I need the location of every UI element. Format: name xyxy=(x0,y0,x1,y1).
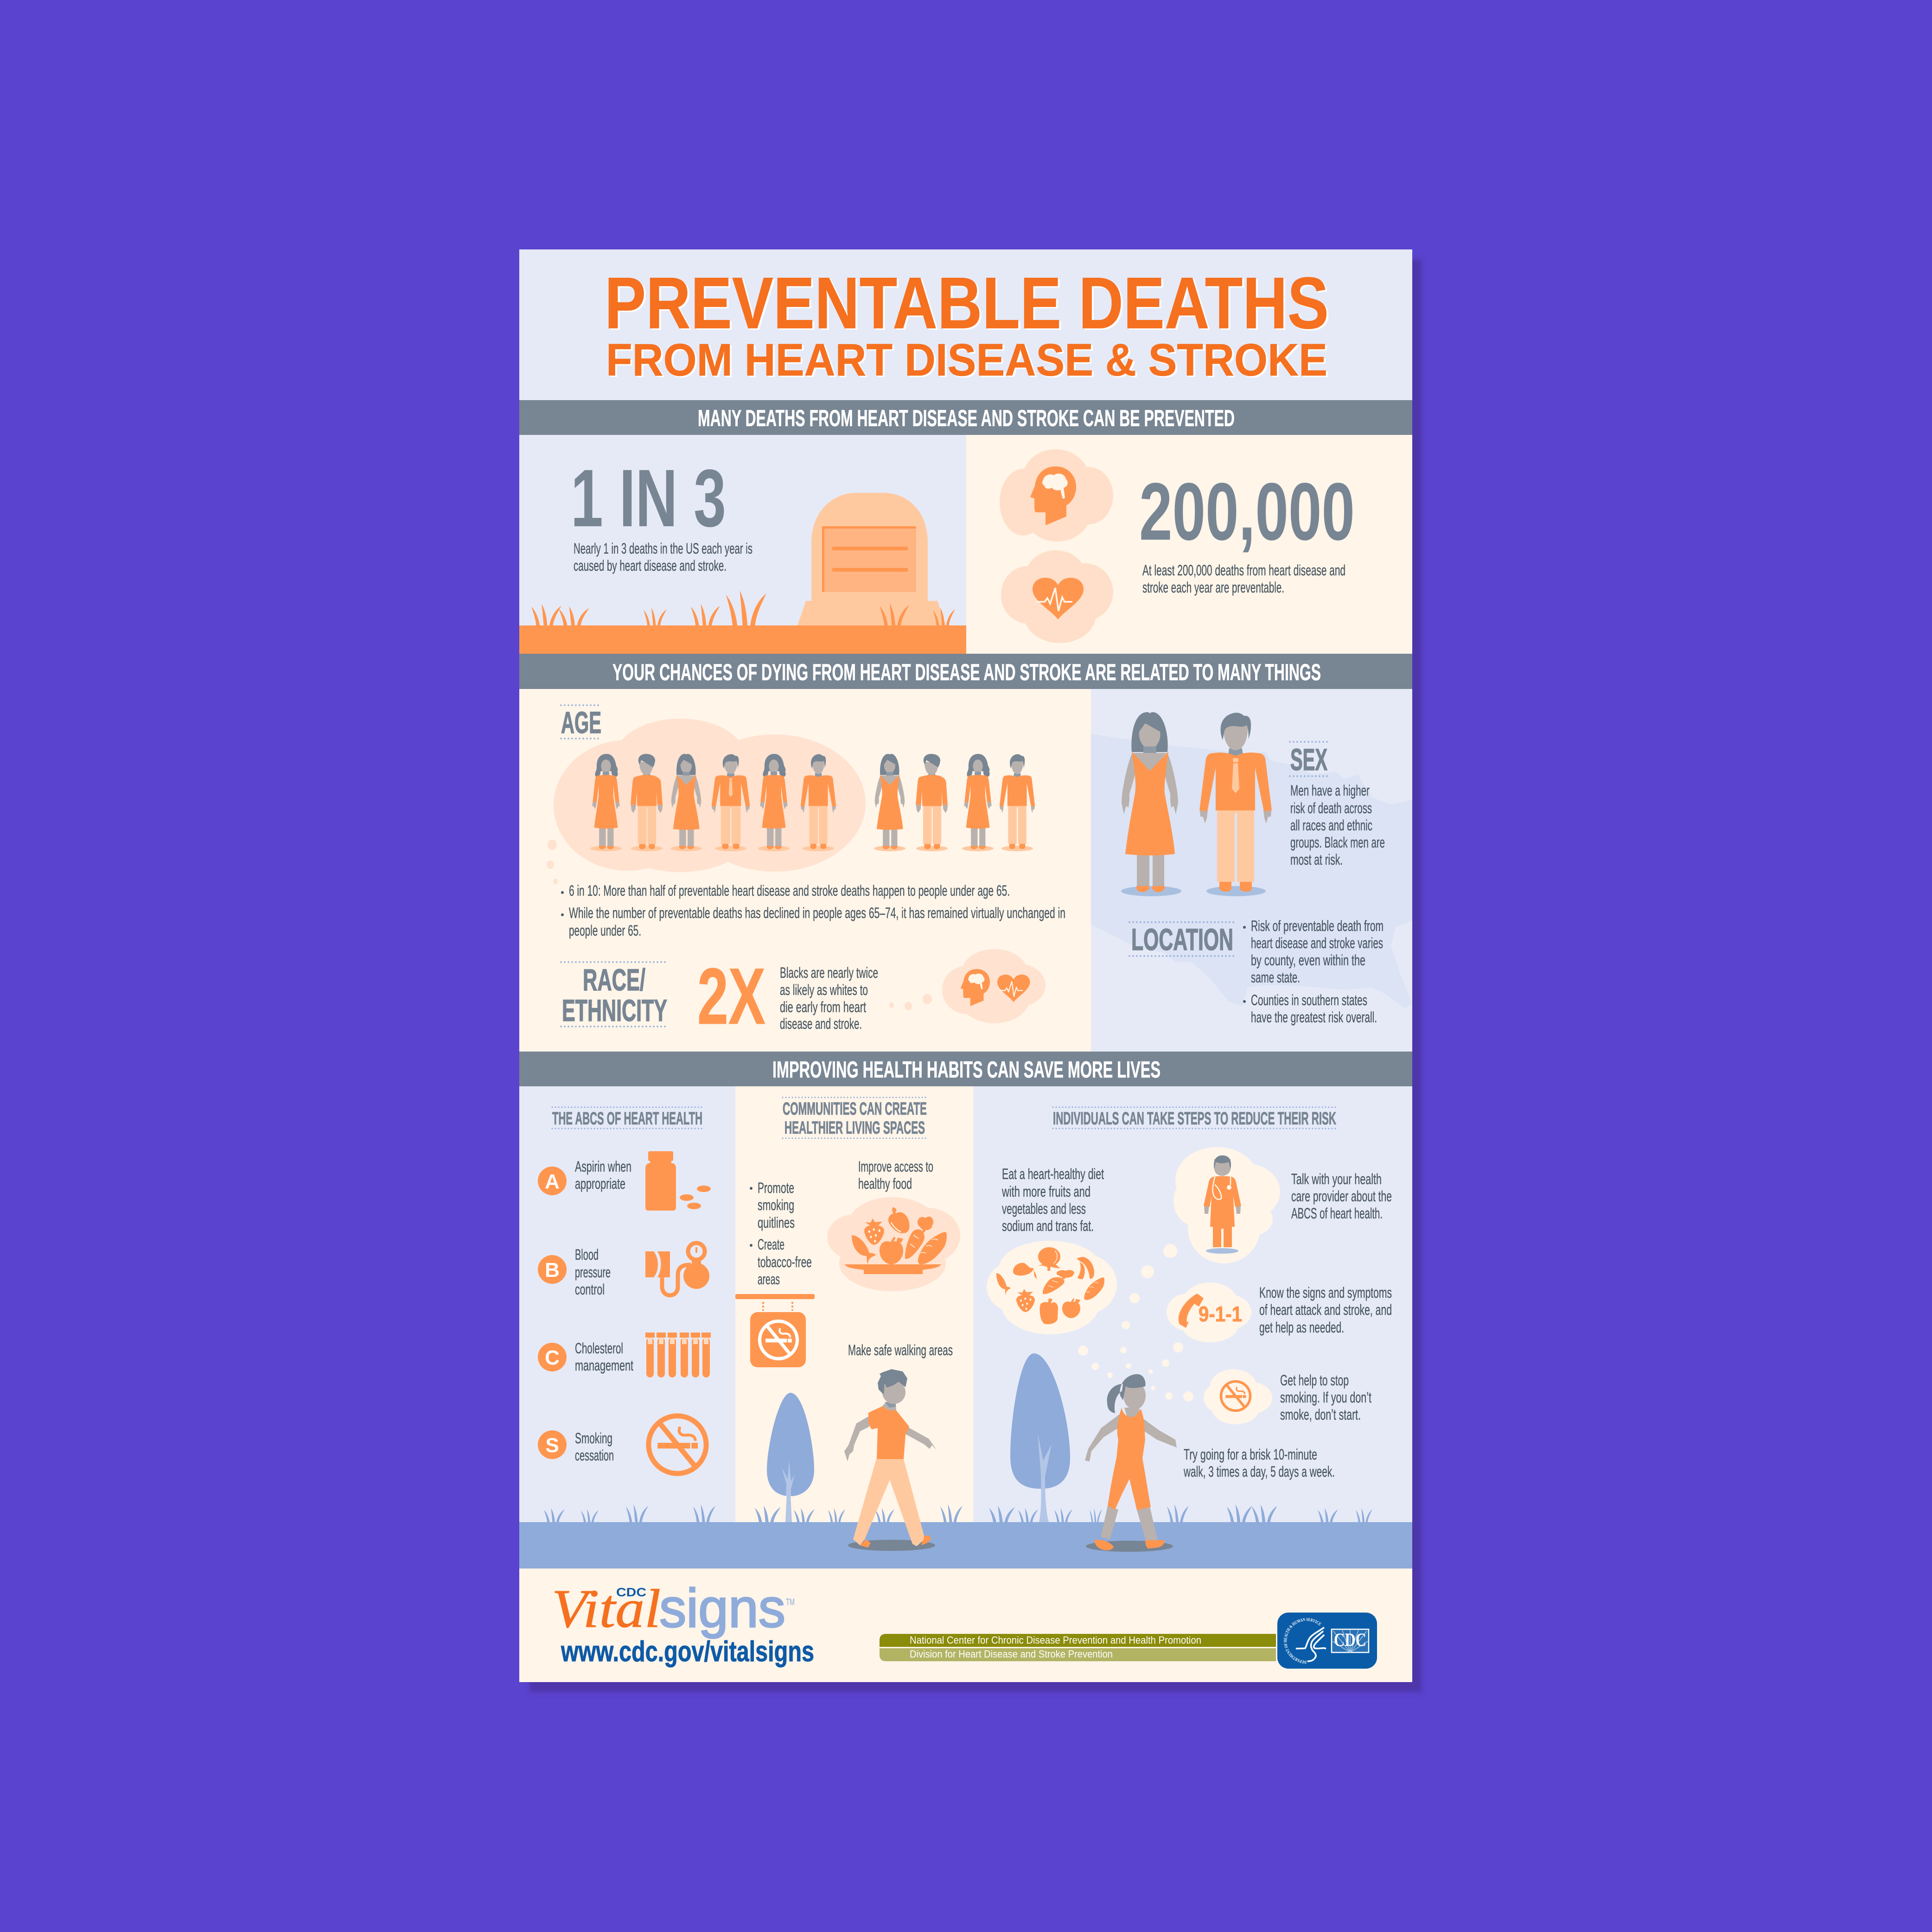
heading: location xyxy=(1129,922,1235,956)
text: eat healthy xyxy=(1001,1166,1104,1234)
heading: race/ethnicity: RACE/ xyxy=(583,963,645,997)
item: S smoking xyxy=(538,1416,706,1473)
heading: sex: SEX xyxy=(1290,742,1327,777)
heading: race/ethnicity: ETHNICITY xyxy=(562,993,667,1027)
text: location bullets: Counties in southern states xyxy=(1251,992,1367,1008)
heading: individuals xyxy=(1053,1107,1336,1129)
icon: tree xyxy=(1010,1353,1070,1522)
icon: no smoking sign xyxy=(735,1294,815,1367)
text: age bullets xyxy=(561,882,1065,939)
heading: communities xyxy=(783,1097,927,1138)
item: A aspirin: A xyxy=(545,1170,560,1193)
text: smoking bullets: Promote xyxy=(758,1180,794,1196)
text: eat healthy: Eat a heart-healthy diet xyxy=(1002,1166,1104,1182)
text: brisk walk: Try going for a brisk 10-minute xyxy=(1184,1446,1317,1463)
logo: CDC Vital Signs: Vital xyxy=(552,1578,661,1639)
text: 1 in 3 description xyxy=(574,540,752,574)
item: B blood pressure xyxy=(538,1243,709,1298)
stat: 1 in 3: 1 IN 3 xyxy=(571,453,726,544)
item: C cholesterol: management xyxy=(575,1357,633,1374)
logo: HHS CDC: CDC xyxy=(1334,1629,1366,1650)
item: A aspirin: Aspirin when xyxy=(575,1158,631,1175)
text: sex description: Men have a higher xyxy=(1290,782,1370,799)
grass: blue tufts xyxy=(544,1505,1372,1522)
panel: communities xyxy=(735,1086,973,1522)
title: PREVENTABLE DEATHS xyxy=(605,262,1329,344)
text: stop smoking: Get help to stop xyxy=(1280,1372,1349,1389)
banner: your chances xyxy=(519,654,1412,689)
grass: orange tufts xyxy=(531,591,955,625)
organization bars: Division for Heart Disease and Stroke Prevention xyxy=(910,1648,1113,1660)
panel: age and race xyxy=(519,689,1091,1052)
text: eat healthy: vegetables and less xyxy=(1002,1200,1086,1217)
text: location bullets: by county, even within the xyxy=(1251,952,1365,969)
text: age bullets: people under 65. xyxy=(569,922,641,939)
heading: location: LOCATION xyxy=(1131,922,1233,956)
text: age bullets: 6 in 10: More than half of preventable heart disease and stroke deaths happen to people under age 65. xyxy=(569,882,1010,899)
panel: ABCs of heart health xyxy=(519,1086,735,1522)
ground: blue xyxy=(519,1522,1412,1569)
text: 1 in 3 description: caused by heart disease and stroke. xyxy=(574,557,727,574)
heading: communities: COMMUNITIES CAN CREATE xyxy=(783,1099,927,1119)
heading: sex xyxy=(1290,742,1328,777)
organization bars xyxy=(880,1634,1276,1661)
banner: many deaths: MANY DEATHS FROM HEART DISEASE AND STROKE CAN BE PREVENTED xyxy=(698,405,1235,431)
text: walking areas: Make safe walking areas xyxy=(848,1342,953,1358)
text: sex description: most at risk. xyxy=(1290,851,1343,868)
item: B blood pressure: pressure xyxy=(575,1264,611,1281)
banner: improving health habits xyxy=(519,1052,1412,1086)
stat: 200,000: 200,000 xyxy=(1139,466,1355,557)
text: eat healthy: sodium and trans fat. xyxy=(1002,1218,1094,1234)
text: 200,000 description: At least 200,000 deaths from heart disease and xyxy=(1142,562,1345,579)
text: 200,000 description: stroke each year are preventable. xyxy=(1142,579,1284,596)
logo: CDC Vital Signs: TM xyxy=(786,1597,795,1607)
item: C cholesterol: C xyxy=(545,1346,560,1369)
heading: race/ethnicity xyxy=(561,962,667,1027)
cloud: age xyxy=(547,719,866,884)
item: S smoking: cessation xyxy=(575,1447,614,1464)
text: eat healthy: with more fruits and xyxy=(1001,1183,1090,1200)
icon: no smoking cloud xyxy=(1204,1369,1272,1424)
organization bars: National Center for Chronic Disease Prevention and Health Promotion xyxy=(910,1634,1201,1646)
text: know the signs: get help as needed. xyxy=(1259,1319,1344,1336)
item: B blood pressure: Blood xyxy=(575,1246,599,1263)
text: improve food access: healthy food xyxy=(858,1175,912,1192)
item: S smoking: Smoking xyxy=(575,1430,612,1447)
logo: CDC Vital Signs: CDC xyxy=(616,1585,646,1599)
text: know the signs: Know the signs and symptoms xyxy=(1259,1284,1392,1301)
text: stop smoking: smoking. If you don’t xyxy=(1280,1389,1371,1406)
item: C cholesterol: Cholesterol xyxy=(575,1340,623,1357)
icon: tombstone xyxy=(797,493,946,625)
text: race description: disease and stroke. xyxy=(780,1015,862,1032)
text: smoking bullets xyxy=(750,1180,812,1288)
text: smoking bullets: areas xyxy=(758,1271,780,1288)
icon: tree xyxy=(767,1393,814,1522)
icon: 9-1-1 cloud xyxy=(1167,1282,1251,1342)
icon: heart in cloud xyxy=(1001,550,1113,643)
url: www.cdc.gov/vitalsigns xyxy=(561,1636,814,1668)
text: brisk walk xyxy=(1183,1446,1335,1480)
text: location bullets: Risk of preventable death from xyxy=(1251,918,1384,934)
text: race description xyxy=(780,964,878,1032)
heading: age xyxy=(561,705,602,740)
item: B blood pressure: B xyxy=(545,1259,560,1282)
heading: ABCs xyxy=(552,1107,703,1129)
text: improve food access xyxy=(858,1158,933,1192)
text: talk with provider: care provider about the xyxy=(1291,1188,1392,1205)
panel: title background xyxy=(519,249,1412,400)
text: location bullets xyxy=(1243,918,1384,1026)
people row: 6 in 10 xyxy=(590,754,1035,851)
text: race description: as likely as whites to xyxy=(780,982,868,998)
text: 200,000 description xyxy=(1142,562,1345,596)
text: location bullets: heart disease and stroke varies xyxy=(1251,935,1383,951)
text: know the signs: of heart attack and stroke, and xyxy=(1259,1301,1392,1318)
text: brisk walk: walk, 3 times a day, 5 days a week. xyxy=(1183,1463,1335,1480)
text: smoking bullets: smoking xyxy=(758,1197,794,1213)
panel: 200,000 xyxy=(966,435,1412,654)
figure: walking woman xyxy=(1085,1374,1177,1552)
text: know the signs xyxy=(1259,1284,1392,1336)
text: sex description: risk of death across xyxy=(1290,800,1372,816)
text: sex description xyxy=(1290,782,1385,868)
item: S smoking: S xyxy=(545,1434,559,1457)
heading: communities: HEALTHIER LIVING SPACES xyxy=(784,1118,925,1138)
item: B blood pressure: control xyxy=(575,1281,605,1298)
text: talk with provider: Talk with your health xyxy=(1291,1171,1382,1187)
logo: HHS CDC: DEPARTMENT OF HEALTH & HUMAN SERVICES-USA xyxy=(0,0,1322,1664)
panel: sex and location xyxy=(1091,689,1412,1052)
figure: walking man xyxy=(844,1369,937,1551)
icon: brain in cloud xyxy=(1000,449,1113,542)
text: talk with provider xyxy=(1291,1171,1392,1222)
panel: 1 in 3 xyxy=(519,435,966,654)
text: smoking bullets: quitlines xyxy=(758,1214,795,1231)
heading: age: AGE xyxy=(561,705,601,740)
text: location bullets: same state. xyxy=(1251,969,1300,986)
icon: doctor in cloud xyxy=(1173,1147,1280,1263)
heading: individuals: INDIVIDUALS CAN TAKE STEPS TO REDUCE THEIR RISK xyxy=(1053,1109,1336,1129)
panel: footer xyxy=(0,0,1412,1682)
text: stop smoking xyxy=(1280,1372,1371,1423)
title xyxy=(605,262,1329,385)
text: location bullets: have the greatest risk overall. xyxy=(1251,1009,1377,1026)
item: C cholesterol xyxy=(538,1333,711,1377)
heading: ABCs: THE ABCS OF HEART HEALTH xyxy=(552,1109,702,1129)
logo: CDC Vital Signs: signs xyxy=(659,1578,785,1639)
text: race description: Blacks are nearly twice xyxy=(780,964,878,981)
banner: many deaths xyxy=(519,400,1412,435)
text: smoking bullets: Create xyxy=(758,1236,784,1253)
text: talk with provider: ABCS of heart health. xyxy=(1291,1205,1383,1222)
item: A aspirin: appropriate xyxy=(575,1175,625,1192)
poster xyxy=(0,0,1412,1682)
map: United States xyxy=(1091,734,1412,1008)
text: race description: die early from heart xyxy=(780,999,866,1015)
icon: food cloud xyxy=(987,1241,1117,1334)
banner: your chances: YOUR CHANCES OF DYING FROM HEART DISEASE AND STROKE ARE RELATED TO MANY THINGS xyxy=(612,659,1321,685)
thought dots xyxy=(1078,1244,1193,1402)
icon: plate of food in cloud xyxy=(827,1197,960,1291)
text: age bullets: While the number of preventable deaths has declined in people ages 65–74, it has remained virtually unchanged in xyxy=(569,905,1065,921)
text: improve food access: Improve access to xyxy=(858,1158,933,1175)
icon: thought cloud with brain and heart xyxy=(889,949,1046,1023)
item: A aspirin xyxy=(538,1151,711,1211)
text: sex description: all races and ethnic xyxy=(1290,817,1372,834)
poster shadow xyxy=(529,260,1422,1692)
panel: individuals xyxy=(973,1086,1412,1522)
icon: 9-1-1 cloud: 9-1-1 xyxy=(1199,1302,1242,1326)
text: smoking bullets: tobacco-free xyxy=(758,1254,812,1270)
text: sex description: groups. Black men are xyxy=(1290,834,1385,851)
figures: woman and man xyxy=(1121,712,1272,896)
text: stop smoking: smoke, don’t start. xyxy=(1280,1406,1361,1423)
banner: improving health habits: IMPROVING HEALTH HABITS CAN SAVE MORE LIVES xyxy=(772,1057,1160,1083)
text: 1 in 3 description: Nearly 1 in 3 deaths in the US each year is xyxy=(574,540,752,557)
title: FROM HEART DISEASE & STROKE xyxy=(606,334,1327,385)
ground: orange xyxy=(519,625,966,654)
stat: 2X: 2X xyxy=(697,952,765,1041)
logo: CDC Vital Signs xyxy=(552,1578,795,1639)
